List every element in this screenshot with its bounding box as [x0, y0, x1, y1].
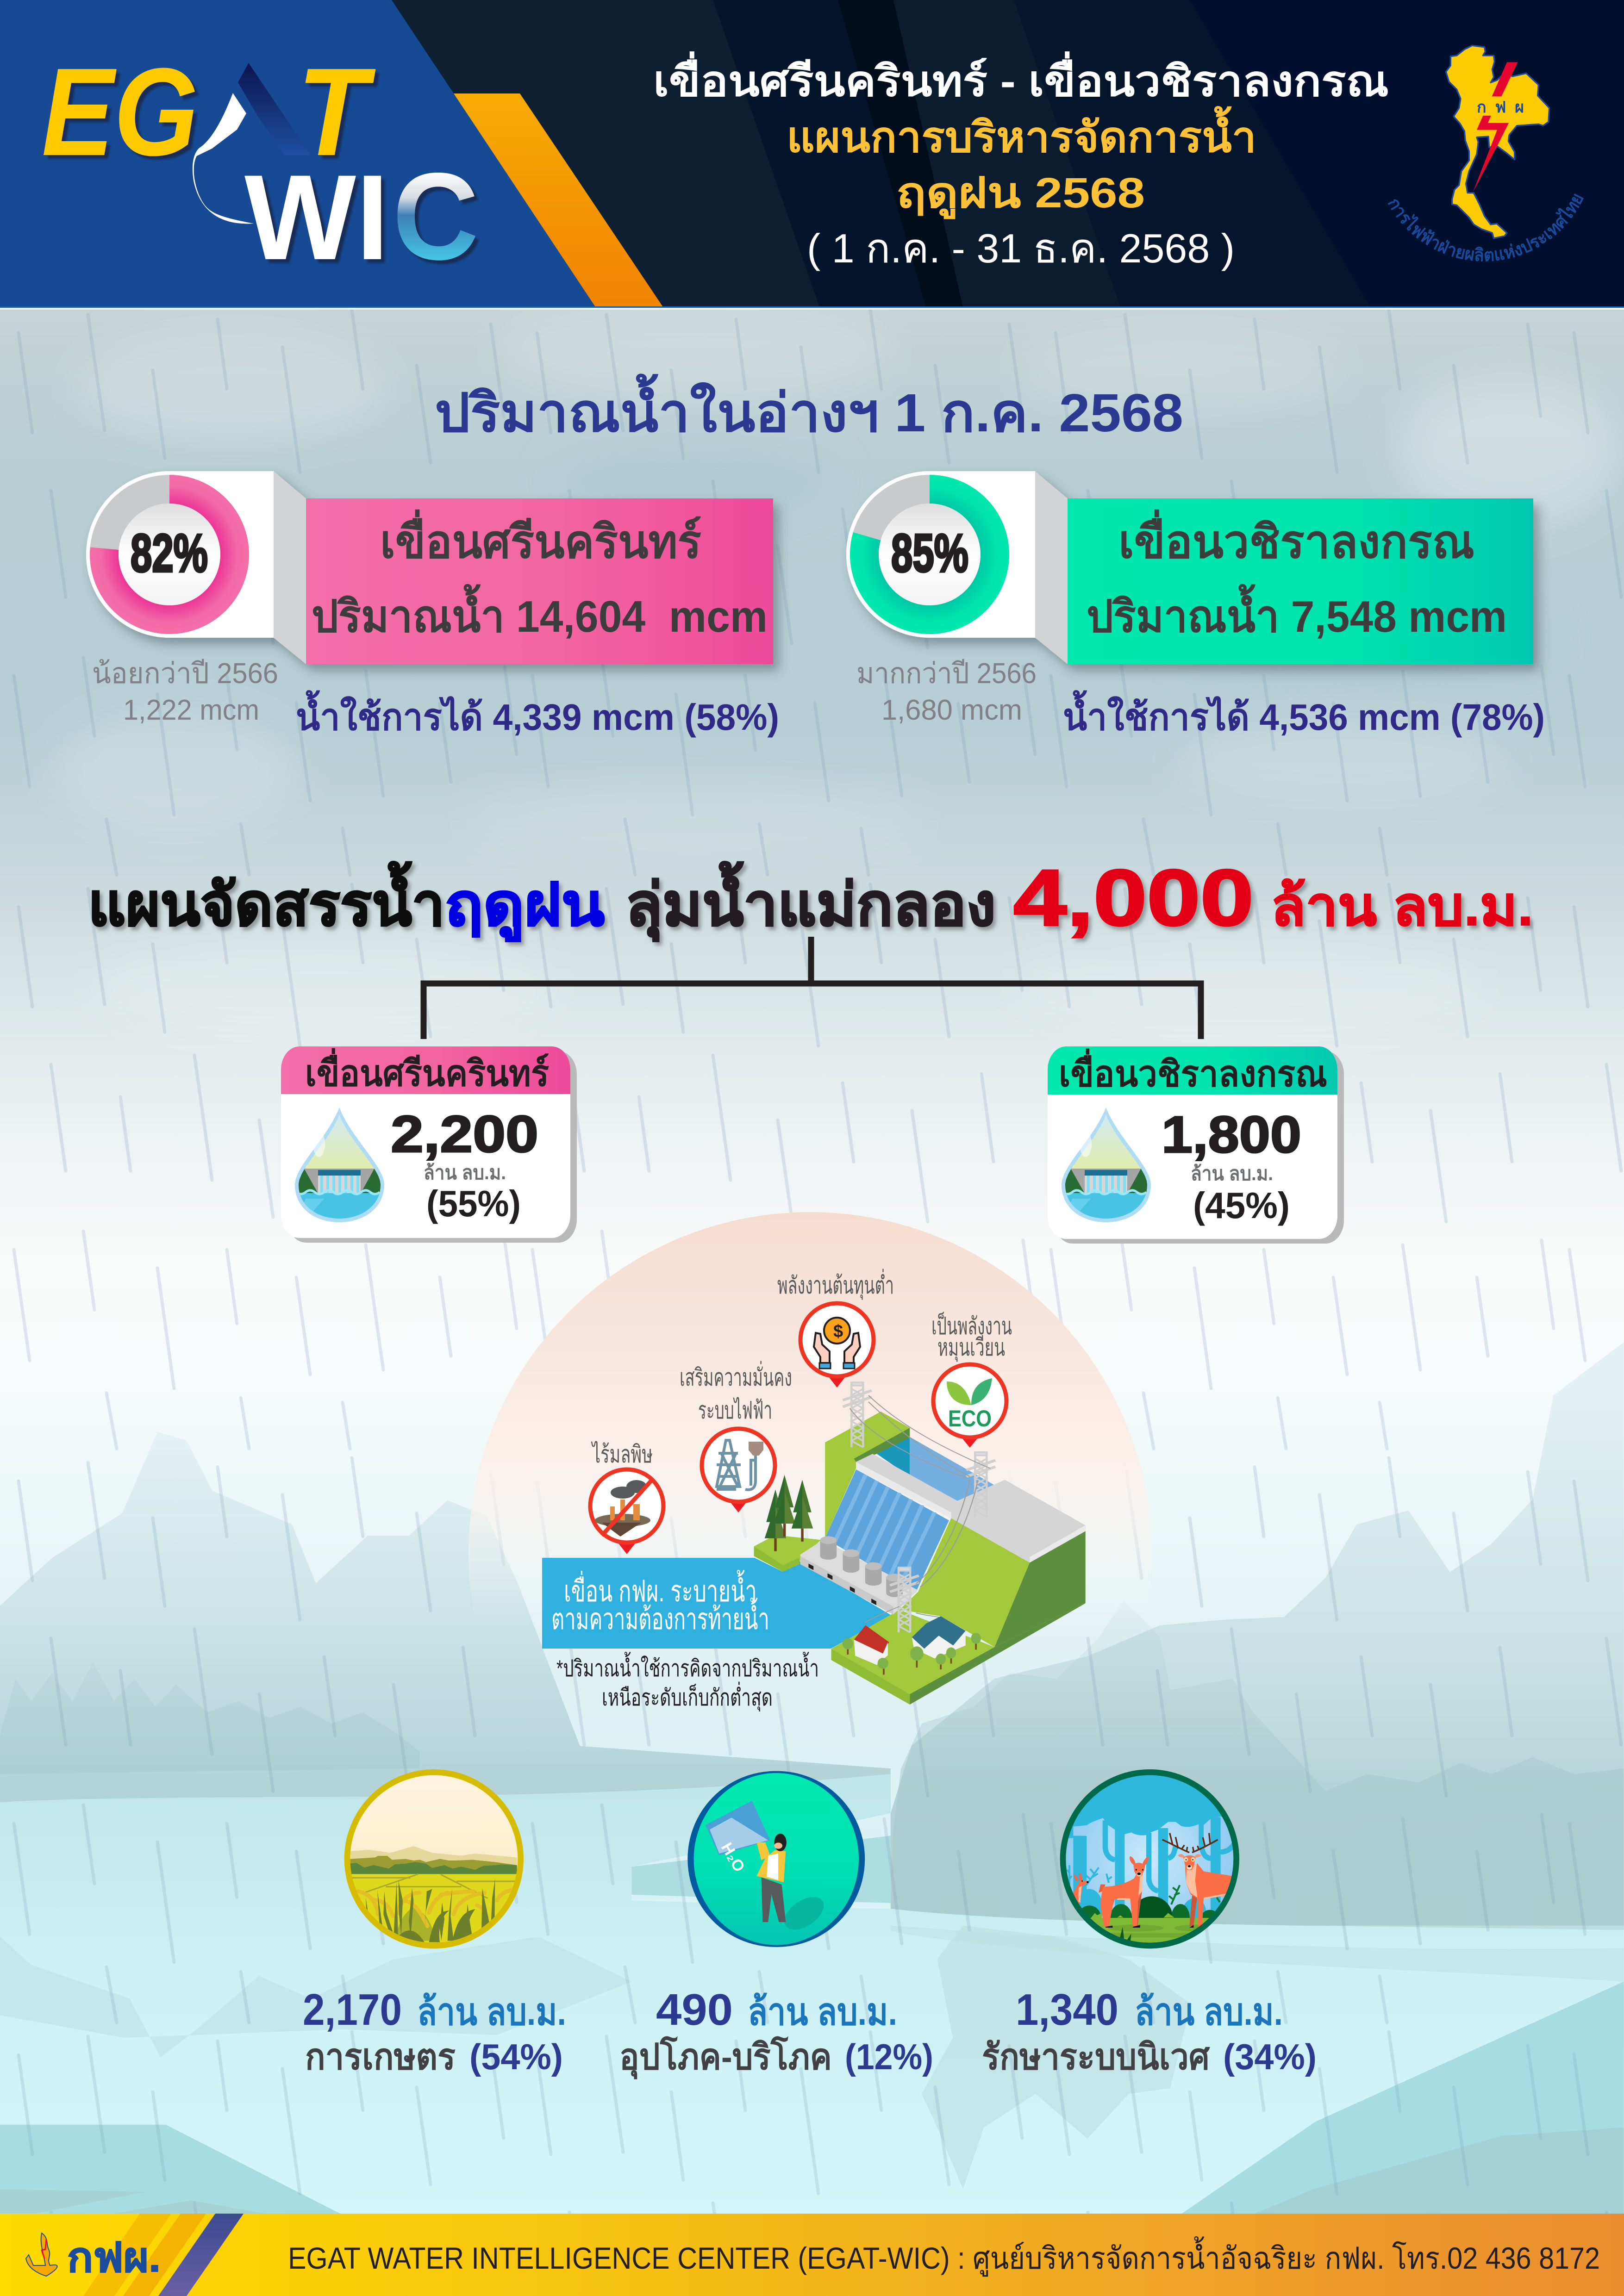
- icon: factory smoke crossed out: [595, 1480, 652, 1537]
- pin: low cost energy: [777, 1269, 894, 1388]
- pin: renewable ECO: หมุนเวียน: [937, 1334, 1005, 1362]
- title block: ฤดูฝน 2568: [896, 169, 1145, 219]
- stat: consumption: (12%): [845, 2036, 933, 2077]
- footer logo: [26, 2233, 161, 2280]
- section title: ปริมาณน้ำในอ่างฯ 1 ก.ค. 2568: [435, 373, 1183, 443]
- right face: [994, 1531, 1086, 1647]
- left embankment: [825, 1412, 910, 1538]
- callout: release water: เขื่อน กฟผ. ระบายน้ำ: [564, 1570, 757, 1608]
- stat: agriculture: (54%): [469, 2036, 563, 2077]
- title block: [653, 51, 1389, 271]
- pin: low cost energy: พลังงานต้นทุนต่ำ: [777, 1269, 894, 1300]
- houses: [843, 1616, 981, 1674]
- usable water: น้ำใช้การได้ 4,339 mcm (58%): [296, 690, 779, 738]
- use group: agriculture image: [347, 1772, 521, 1947]
- H2O label: H₂O: [718, 1840, 748, 1875]
- card: Vajiralongkorn allocation: ล้าน ลบ.ม.: [1191, 1163, 1273, 1184]
- footnote: [556, 1652, 819, 1711]
- donut gauge 82%: [104, 489, 235, 620]
- EGAT letters: EG: [42, 43, 198, 182]
- panel body with gauge: [846, 471, 1533, 664]
- comparison with 2566: 1,680 mcm: [881, 694, 1022, 726]
- pin: grid stability: เสริมความมั่นคง: [680, 1361, 792, 1391]
- WIC letters: WI: [244, 149, 389, 285]
- sprigs: [1067, 1865, 1112, 1890]
- header orange slash: [454, 93, 663, 307]
- rice blades: [366, 1879, 495, 1942]
- canopy and trunks: [1063, 1773, 1236, 1838]
- rice panicles: [358, 1890, 512, 1926]
- donut gauge 85%: [864, 489, 995, 620]
- footer band: [0, 2214, 1624, 2296]
- donut gauge 85%: 85%: [891, 523, 968, 583]
- mountains and lake: [0, 1342, 1624, 2221]
- card: Srinagarind allocation: ล้าน ลบ.ม.: [424, 1162, 506, 1183]
- peach sun circle behind dam: [468, 1212, 1152, 1895]
- use group: consumption image: [691, 1772, 862, 1946]
- pin: no pollution: ไร้มลพิษ: [591, 1441, 653, 1468]
- card: Srinagarind allocation: เขื่อนศรีนครินทร์: [305, 1048, 549, 1094]
- deer small: [1073, 1873, 1089, 1905]
- callout: release water: [551, 1570, 769, 1636]
- stat: consumption: [619, 1985, 933, 2079]
- right embankment: [899, 1518, 1030, 1647]
- panel: Vajiralongkorn reservoir: [846, 471, 1545, 738]
- use group: ecosystem image: [1063, 1772, 1237, 1946]
- main heading: ฤดูฝน: [445, 872, 605, 942]
- stat: agriculture: การเกษตร: [305, 2036, 456, 2077]
- comparison with 2566: [92, 658, 278, 726]
- pylons and wires: [843, 1382, 995, 1632]
- panel body with gauge: [86, 471, 773, 664]
- title block: เขื่อนศรีนครินทร์ - เขื่อนวชิราลงกรณ: [653, 51, 1389, 105]
- EGAT letters: [42, 43, 376, 182]
- footnote: *ปริมาณน้ำใช้การคิดจากปริมาณน้ำ: [556, 1652, 819, 1681]
- comparison with 2566: 1,222 mcm: [123, 694, 259, 726]
- stat: ecosystem: (34%): [1223, 2036, 1317, 2077]
- connector tree: [424, 937, 1201, 1039]
- icon: leaves and ECO: [947, 1378, 992, 1431]
- comparison with 2566: มากกว่าปี 2566: [856, 658, 1037, 690]
- volume: ปริมาณน้ำ 14,604 mcm: [312, 584, 768, 641]
- callout: release water: ตามความต้องการท้ายน้ำ: [551, 1598, 769, 1636]
- footer logo: กฟผ.: [67, 2234, 161, 2280]
- stat: agriculture: [303, 1985, 566, 2077]
- icon: water drop with dam: [1058, 1108, 1156, 1222]
- dam name: เขื่อนวชิราลงกรณ: [1118, 509, 1474, 568]
- EGAT letters: T: [297, 43, 376, 182]
- logo: EGAT WIC: [42, 43, 479, 286]
- spillway: [825, 1469, 949, 1592]
- title block: แผนการบริหารจัดการน้ำ: [787, 106, 1256, 161]
- swoosh A: [193, 63, 311, 224]
- pin: no pollution: [590, 1441, 663, 1554]
- WIC letters: [244, 147, 479, 286]
- pin: renewable ECO: [931, 1312, 1012, 1448]
- logo: EGAT Thailand map emblem: กฟผ: [1477, 99, 1524, 116]
- icon: hands with coin: [814, 1318, 860, 1369]
- powerhouse platform: [800, 1540, 918, 1615]
- header band: [0, 0, 1624, 310]
- illustration: hydro dam: [754, 1382, 1086, 1705]
- panel: Srinagarind reservoir: [86, 471, 779, 738]
- deer big: [1162, 1833, 1233, 1928]
- icon: leaves and ECO: ECO: [948, 1406, 992, 1431]
- card: Vajiralongkorn allocation: 1,800: [1162, 1106, 1301, 1164]
- main heading: 4,000: [1013, 853, 1254, 942]
- left riverside land: [754, 1535, 821, 1566]
- dam crest: [856, 1454, 1086, 1562]
- card: Srinagarind allocation: (55%): [426, 1183, 521, 1224]
- main heading: [88, 853, 1533, 942]
- trees: [765, 1475, 813, 1551]
- stat: agriculture: 2,170: [303, 1985, 402, 2035]
- stat: agriculture: ล้าน ลบ.ม.: [417, 1991, 566, 2033]
- volume: ปริมาณน้ำ 7,548 mcm: [1087, 584, 1507, 641]
- pin: grid stability: [680, 1361, 792, 1512]
- lower land: [831, 1610, 994, 1694]
- comparison with 2566: [856, 658, 1037, 726]
- stat: consumption: 490: [656, 1985, 733, 2035]
- pin: grid stability: ระบบไฟฟ้า: [698, 1397, 772, 1424]
- icon: water drop with dam: [292, 1108, 389, 1222]
- donut gauge 82%: 82%: [131, 523, 208, 583]
- stat: consumption: ล้าน ลบ.ม.: [748, 1991, 897, 2033]
- card: Vajiralongkorn allocation: เขื่อนวชิราลงกรณ: [1059, 1048, 1327, 1094]
- card: Srinagarind allocation: [281, 1046, 577, 1243]
- dam name: เขื่อนศรีนครินทร์: [380, 509, 701, 568]
- comparison with 2566: น้อยกว่าปี 2566: [92, 658, 278, 690]
- card: Vajiralongkorn allocation: (45%): [1193, 1185, 1290, 1226]
- main heading: แผนจัดสรรน้ำ: [88, 861, 445, 938]
- icon: hands with coin: $: [833, 1322, 843, 1341]
- stat: ecosystem: [982, 1985, 1317, 2077]
- logo: EGAT Thailand map emblem: [1384, 45, 1588, 266]
- WIC letters: C: [393, 147, 479, 286]
- grass: [1065, 1918, 1235, 1946]
- stat: ecosystem: ล้าน ลบ.ม.: [1135, 1991, 1283, 2033]
- bushes: [1078, 1905, 1101, 1929]
- usable water: น้ำใช้การได้ 4,536 mcm (78%): [1063, 690, 1545, 738]
- stat: consumption: อุปโภค-บริโภค: [619, 2035, 832, 2079]
- pin: renewable ECO: เป็นพลังงาน: [931, 1312, 1012, 1340]
- card: Vajiralongkorn allocation: [1048, 1046, 1344, 1244]
- card: Srinagarind allocation: 2,200: [391, 1105, 538, 1163]
- deer middle: [1099, 1856, 1149, 1928]
- footnote: เหนือระดับเก็บกักต่ำสุด: [602, 1682, 773, 1711]
- main heading: ลุ่มน้ำแม่กลอง: [625, 861, 996, 942]
- icon: pylon and plug: [717, 1440, 762, 1490]
- reservoir: [877, 1437, 997, 1504]
- stat: ecosystem: รักษาระบบนิเวศ: [982, 2036, 1210, 2077]
- logo: EGAT Thailand map emblem: การไฟฟ้าฝ่ายผลิตแห่งประเทศไทย: [1384, 190, 1588, 266]
- stat: ecosystem: 1,340: [1016, 1985, 1118, 2035]
- river water surface: [542, 1558, 891, 1649]
- title block: ( 1 ก.ค. - 31 ธ.ค. 2568 ): [807, 225, 1235, 271]
- main heading: ล้าน ลบ.ม.: [1271, 876, 1533, 937]
